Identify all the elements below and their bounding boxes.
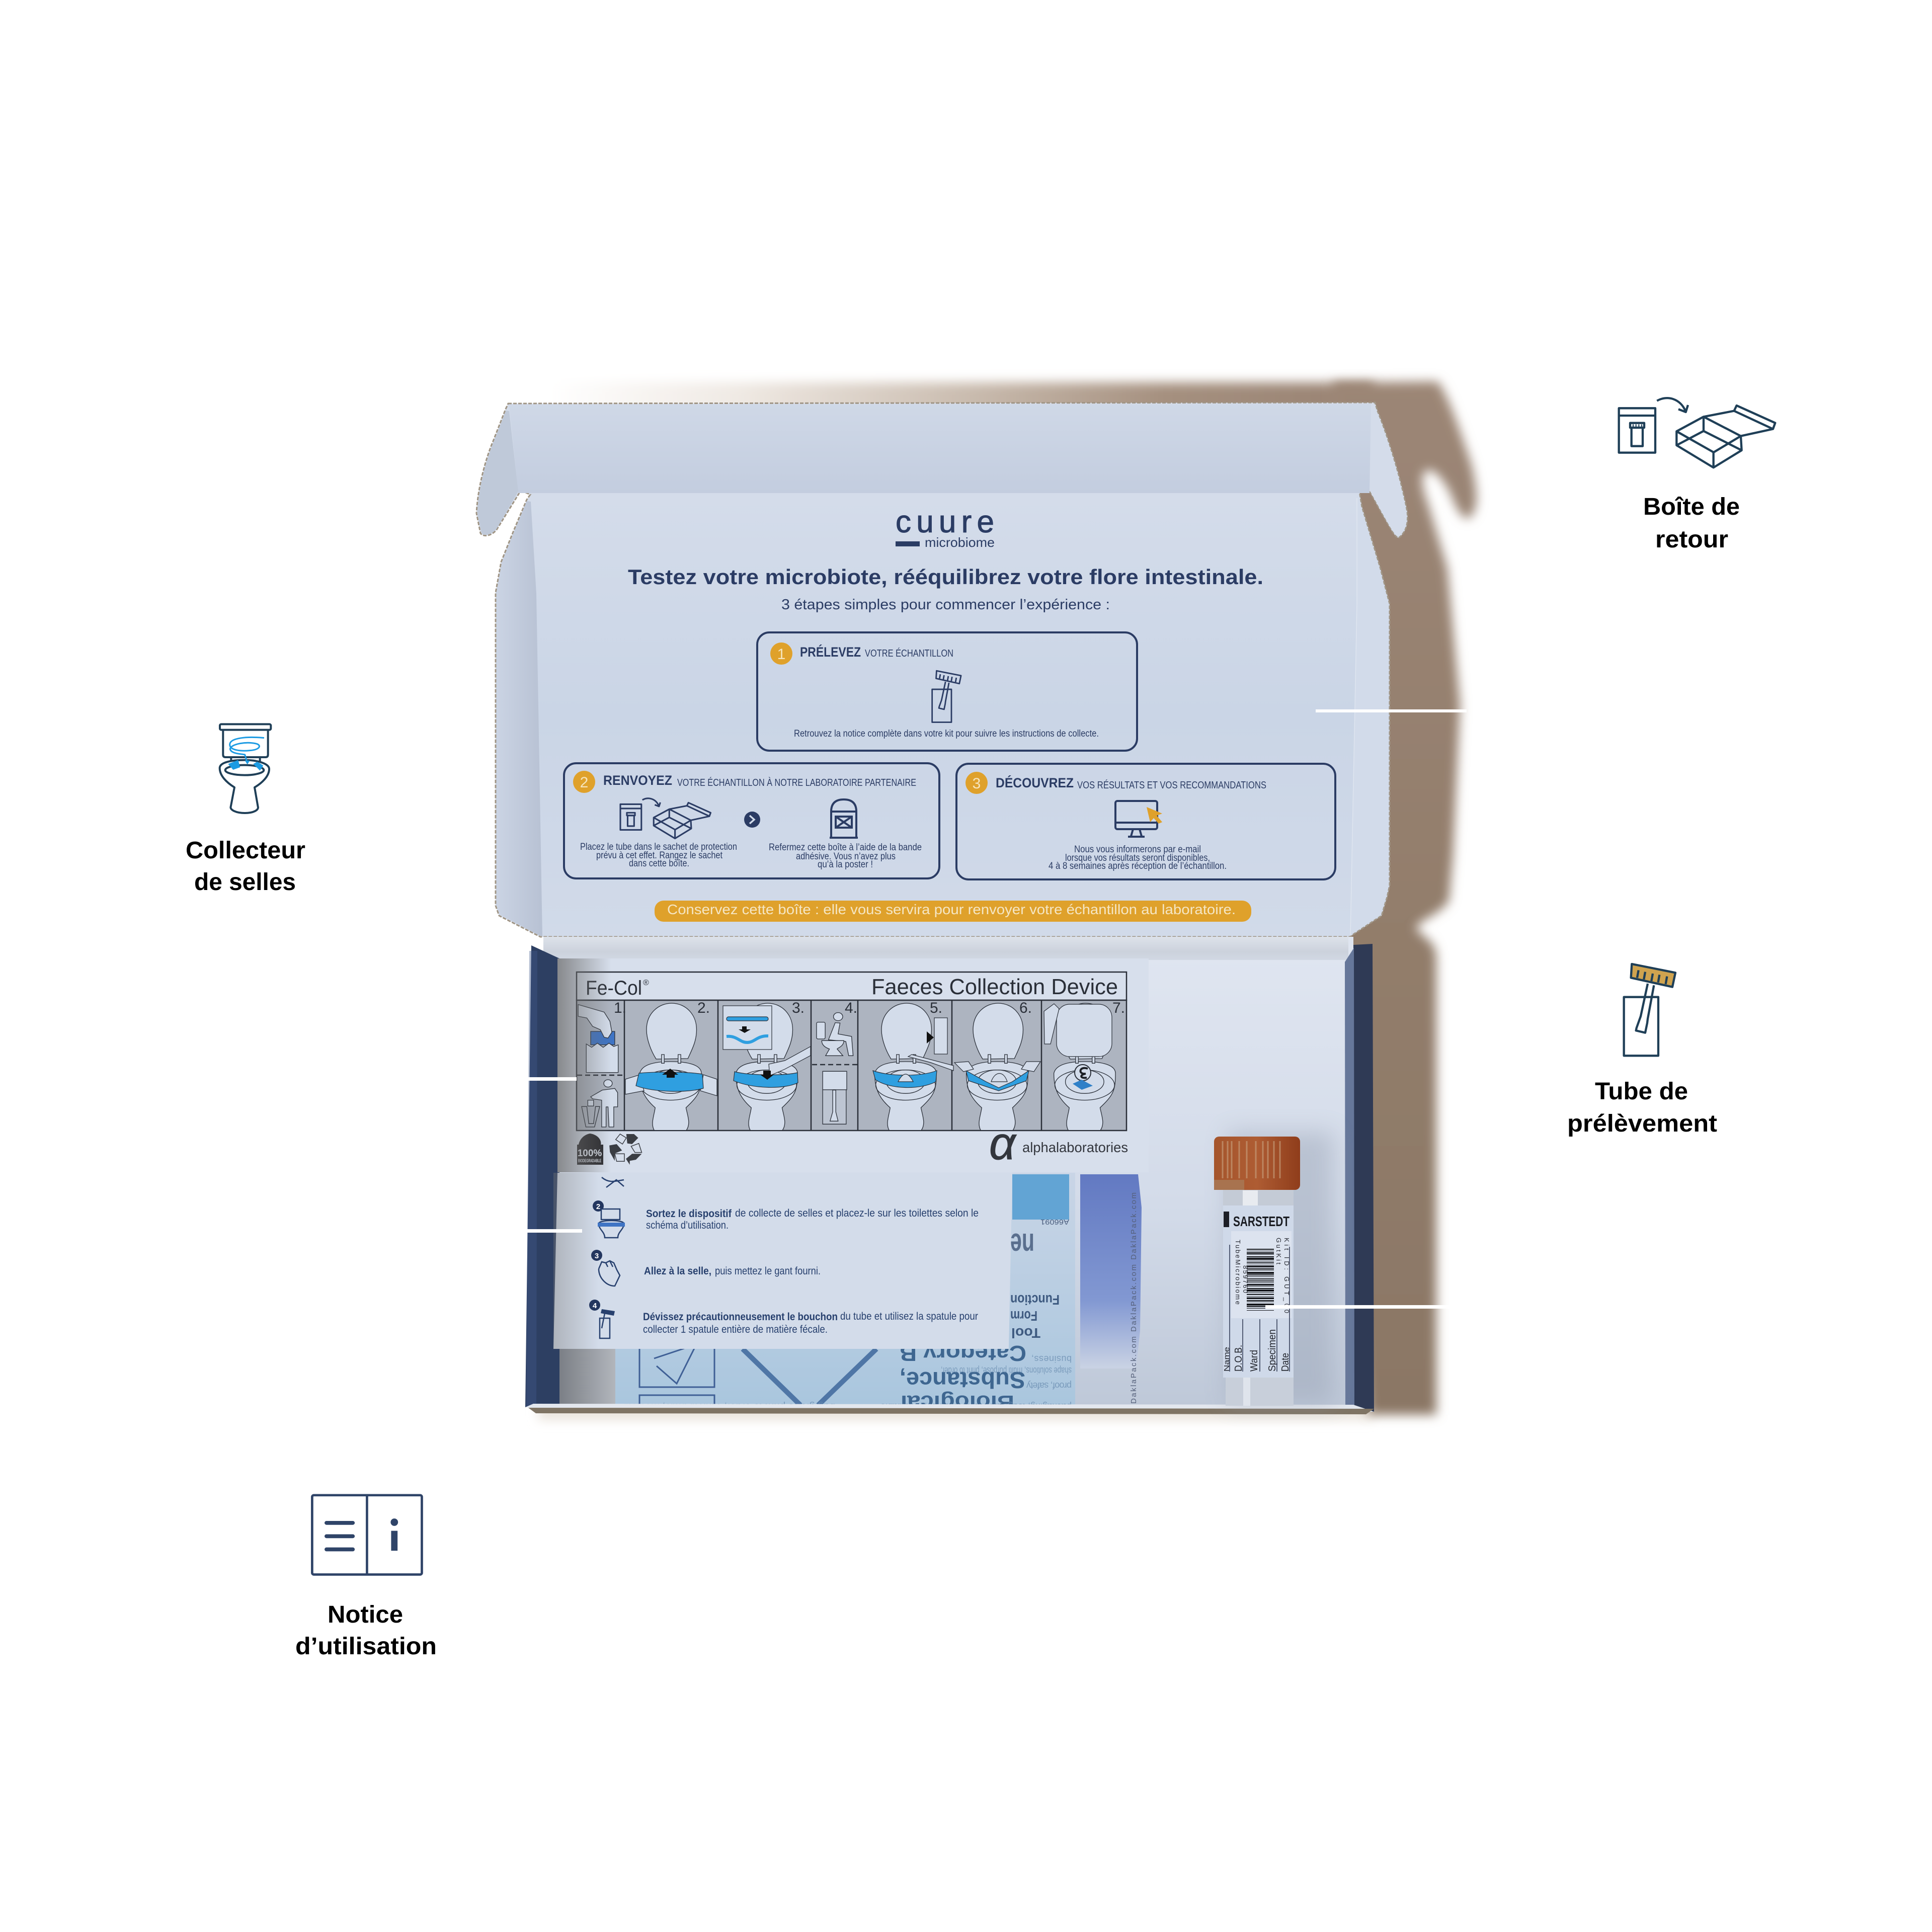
flipped bag text: Tool <box>1011 1325 1040 1341</box>
icon: toilet with collector <box>220 724 271 813</box>
flipped small copy: business, <box>1031 1354 1072 1364</box>
step 4 badge and tube icon: 4 <box>593 1302 597 1310</box>
step 2 text: schéma d’utilisation. <box>646 1220 729 1231</box>
step numbers <box>614 1000 1125 1016</box>
step 3 caption: lorsque vos résultats seront disponibles, <box>1065 853 1210 863</box>
subheading: 3 étapes simples pour commencer l’expérience : <box>781 597 1110 613</box>
panel dividers <box>624 1000 1041 1131</box>
SARSTEDT logo box <box>1224 1212 1229 1227</box>
step 3 text: Allez à la selle, <box>644 1265 711 1277</box>
flipped bag text: Function <box>1010 1292 1060 1308</box>
step 3 title <box>996 775 1266 791</box>
step numbers: 7. <box>1112 1000 1125 1016</box>
pictogram 1: open sachet and bin <box>578 1005 618 1127</box>
step 2 right caption <box>769 842 922 870</box>
icon: monitor and cursor <box>1115 801 1162 837</box>
step numbers: 3. <box>792 1000 804 1016</box>
step 4 text: collecter 1 spatule entière de matière fécale. <box>643 1324 828 1335</box>
icon: tube with gold cap <box>1624 964 1675 1056</box>
step numbers: 5. <box>930 1000 942 1016</box>
label: Boîte de retour: retour <box>1655 526 1728 553</box>
tube rotated text: D.O.B. <box>1233 1345 1244 1372</box>
step 2 badge and toilet icon <box>593 1200 625 1238</box>
transparent seal text: DaklaPack.com DaklaPack.com DaklaPack.com <box>1130 1192 1138 1404</box>
icon: bag and return box <box>1619 398 1775 467</box>
residual icon at top of notice <box>602 1177 624 1187</box>
right wall <box>1350 493 1389 936</box>
panel: step 1 <box>757 632 1137 751</box>
panel: open box lid <box>476 403 1408 937</box>
blue collector and hand, panel 5 <box>873 1018 953 1088</box>
flipped small copy <box>624 1354 1072 1412</box>
panel: step 3 <box>956 764 1335 879</box>
pictograms <box>639 1348 714 1405</box>
tube rotated text <box>1223 1238 1291 1372</box>
tube rotated text: Name <box>1223 1347 1231 1372</box>
icon: bag and box <box>620 798 710 839</box>
step 2 title: RENVOYEZ <box>603 773 672 788</box>
step 3 badge and glove icon <box>591 1250 620 1286</box>
step 4 text <box>643 1311 978 1335</box>
badge 2: 2 <box>580 774 588 791</box>
badge 3 <box>965 772 988 794</box>
tube rotated text: Date <box>1280 1353 1291 1372</box>
background shadow of the box <box>538 381 1477 1420</box>
step 1 title: VOTRE ÉCHANTILLON <box>865 648 953 659</box>
left ear <box>477 411 518 535</box>
light blue bag <box>615 1173 1075 1405</box>
header frame <box>577 972 1126 1000</box>
step 2 text: Sortez le dispositif <box>646 1208 732 1220</box>
grey pouch edge <box>559 1173 616 1405</box>
step 2 badge and toilet icon: 2 <box>596 1202 600 1211</box>
blue header <box>1012 1174 1069 1220</box>
icon: sampling tube <box>932 671 961 722</box>
step 3 badge and glove icon: 3 <box>595 1252 599 1260</box>
notice paper <box>553 1173 1012 1349</box>
SARSTEDT: SARSTEDT <box>1233 1214 1290 1229</box>
pictogram 4: seated figure and tube <box>817 1013 853 1124</box>
flipped bag text: ne <box>1010 1227 1034 1263</box>
alphalaboratories logo: alphalaboratories <box>1022 1140 1128 1155</box>
flipped small copy: proof, safety <box>1026 1381 1072 1391</box>
biodegradable badge <box>577 1134 603 1165</box>
inner sticker <box>1231 1231 1292 1318</box>
callout: gold banner <box>655 901 1251 922</box>
step 2 left caption: prévu à cet effet. Rangez le sachet <box>596 850 723 861</box>
lower tube end <box>1226 1378 1294 1406</box>
badge 1: 1 <box>777 646 785 663</box>
label: Notice d'utilisation: d’utilisation <box>295 1633 437 1660</box>
flipped bag text <box>900 1227 1060 1413</box>
tray upper lip <box>543 937 1348 960</box>
step 2 title <box>603 773 916 788</box>
step 3 caption: 4 à 8 semaines après réception de l’échantillon. <box>1049 861 1227 871</box>
logo: cuure microbiome: microbiome <box>925 535 995 550</box>
label: Collecteur de selles <box>186 724 305 896</box>
biodegradable badge: 100% <box>578 1148 602 1159</box>
tube rotated text: TubeMicrobiome <box>1234 1240 1242 1305</box>
badge 1 <box>770 642 792 665</box>
step 1 caption: Retrouvez la notice complète dans votre kit pour suivre les instructions de collecte. <box>794 729 1099 739</box>
step 2 right caption: adhésive. Vous n’avez plus <box>796 851 896 862</box>
label: Tube de prélèvement <box>1567 964 1717 1137</box>
step 4 text: du tube et utilisez la spatule pour <box>840 1311 978 1322</box>
right navy wall <box>1353 944 1374 1412</box>
blue collector and hands, panel 2 <box>625 1069 717 1096</box>
label: Collecteur de selles: de selles <box>194 869 296 896</box>
step 3 text: puis mettez le gant fourni. <box>715 1265 821 1277</box>
step 2 title: VOTRE ÉCHANTILLON À NOTRE LABORATOIRE PARTENAIRE <box>677 777 916 788</box>
label: Boîte de retour <box>1619 398 1775 553</box>
badge 3: 3 <box>973 775 981 792</box>
panel: biological substance bag <box>559 1173 1142 1413</box>
panel: step 2 <box>564 763 939 878</box>
label text: Boîte de <box>1643 494 1740 520</box>
step 4 text: Dévissez précautionneusement le bouchon <box>643 1311 838 1323</box>
toilets <box>640 1003 1115 1131</box>
front lip of the tray <box>525 1404 1374 1414</box>
Fe-Col title: ® <box>643 979 649 987</box>
panel: instruction notice card <box>553 1173 1012 1349</box>
panel: Fe-Col instruction card <box>557 958 1149 1172</box>
tube neck <box>1223 1188 1294 1209</box>
seat and flush, panel 7 <box>1044 1004 1112 1090</box>
step numbers: 6. <box>1019 1000 1032 1016</box>
flipped small copy: bug grade print to order, clinical trials, medical <box>624 1402 835 1412</box>
tube rotated text: Specimen <box>1267 1329 1278 1372</box>
tube rotated text: Kit ID: GUT_00 <box>1283 1238 1291 1313</box>
tube rotated text: 859760 <box>1242 1265 1249 1293</box>
lid cardboard silhouette <box>476 403 1408 937</box>
step 3 title: VOS RÉSULTATS ET VOS RECOMMANDATIONS <box>1077 779 1266 791</box>
grey pictogram strip <box>577 1000 1126 1131</box>
flipped bag text: Category B <box>900 1341 1026 1365</box>
step 3 caption: Nous vous informerons par e-mail <box>1074 844 1201 855</box>
cap <box>1214 1137 1300 1190</box>
step 2 text: de collecte de selles et placez-le sur les toilettes selon le <box>735 1208 979 1219</box>
blue collector and hand, panel 3 <box>734 1046 811 1087</box>
headline: Testez votre microbiote, rééquilibrez votre flore intestinale. <box>628 565 1263 589</box>
icon: mailbox <box>830 799 858 838</box>
inset card, panel 3 <box>723 1006 772 1050</box>
step 1 title <box>800 644 953 660</box>
step 2 left caption <box>580 842 737 869</box>
panel: sample tube <box>1214 1132 1333 1406</box>
label: Notice d'utilisation <box>295 1495 437 1660</box>
step 3 title: DÉCOUVREZ <box>996 775 1074 790</box>
logo: cuure microbiome: cuure <box>896 505 994 539</box>
tray floor <box>553 937 1353 1410</box>
blue strip <box>1080 1174 1142 1369</box>
step numbers: 2. <box>697 1000 710 1016</box>
device title: Faeces Collection Device <box>871 975 1118 999</box>
tube rotated text: Ward <box>1249 1350 1260 1372</box>
barcode <box>1247 1249 1274 1311</box>
step 2 left caption: Placez le tube dans le sachet de protection <box>580 842 737 852</box>
alphalaboratories logo <box>989 1118 1128 1169</box>
card paper <box>557 958 1149 1172</box>
label: Tube de prélèvement: prélèvement <box>1567 1110 1717 1137</box>
label text: Collecteur <box>186 837 305 864</box>
step 2 right caption: qu’à la poster ! <box>818 859 873 870</box>
step 2 right caption: Refermez cette boîte à l’aide de la bande <box>769 842 922 853</box>
flipped small copy: shape solutions, multi purpose, print to order, <box>941 1365 1072 1376</box>
step 3 text <box>644 1265 821 1277</box>
flipped bag text: Form <box>1010 1308 1037 1324</box>
step 2 left caption: dans cette boîte. <box>629 858 689 869</box>
biodegradable badge: BIODEGRADABLE <box>578 1158 601 1163</box>
left navy wall <box>525 945 559 1407</box>
flipped small copy: packaging, tough and safe, closures, resealable <box>880 1402 1072 1412</box>
label text: Notice <box>328 1601 403 1628</box>
step numbers: 1. <box>614 1000 626 1016</box>
Fe-Col title: Fe-Col <box>586 977 642 999</box>
flipped bag text: Biological <box>901 1391 1014 1413</box>
callout: gold banner: Conservez cette boîte : elle vous servira pour renvoyer votre échantillon au laboratoire. <box>667 902 1236 917</box>
dashed separators <box>577 1065 857 1075</box>
card shadow overlay <box>557 958 611 1172</box>
alphalaboratories logo: α <box>989 1118 1017 1169</box>
pointer lines <box>503 709 1467 1309</box>
flipped product code: A66091 <box>1040 1218 1069 1226</box>
blue collector and hands, panel 6 <box>954 1062 1040 1091</box>
label text: Tube de <box>1595 1078 1688 1105</box>
next arrow <box>744 812 760 828</box>
tube shadow <box>1228 1132 1333 1404</box>
top flap <box>509 404 1371 493</box>
step 1 title: PRÉLEVEZ <box>800 644 861 660</box>
tube rotated text: GutKit <box>1275 1238 1282 1264</box>
V warning triangle <box>743 1349 876 1405</box>
right ear <box>1370 406 1407 537</box>
step 4 badge and tube icon <box>589 1300 615 1338</box>
left wall <box>497 501 542 936</box>
panel: tray of the box <box>525 937 1374 1412</box>
tube label body <box>1223 1205 1294 1378</box>
recycling symbol <box>609 1134 641 1165</box>
step 3 caption <box>1049 844 1227 871</box>
step numbers: 4. <box>845 1000 857 1016</box>
flipped bag text: Substance, <box>900 1367 1025 1393</box>
icon: open leaflet with info <box>312 1495 422 1574</box>
step 2 text <box>646 1208 979 1231</box>
badge 2 <box>573 771 595 793</box>
